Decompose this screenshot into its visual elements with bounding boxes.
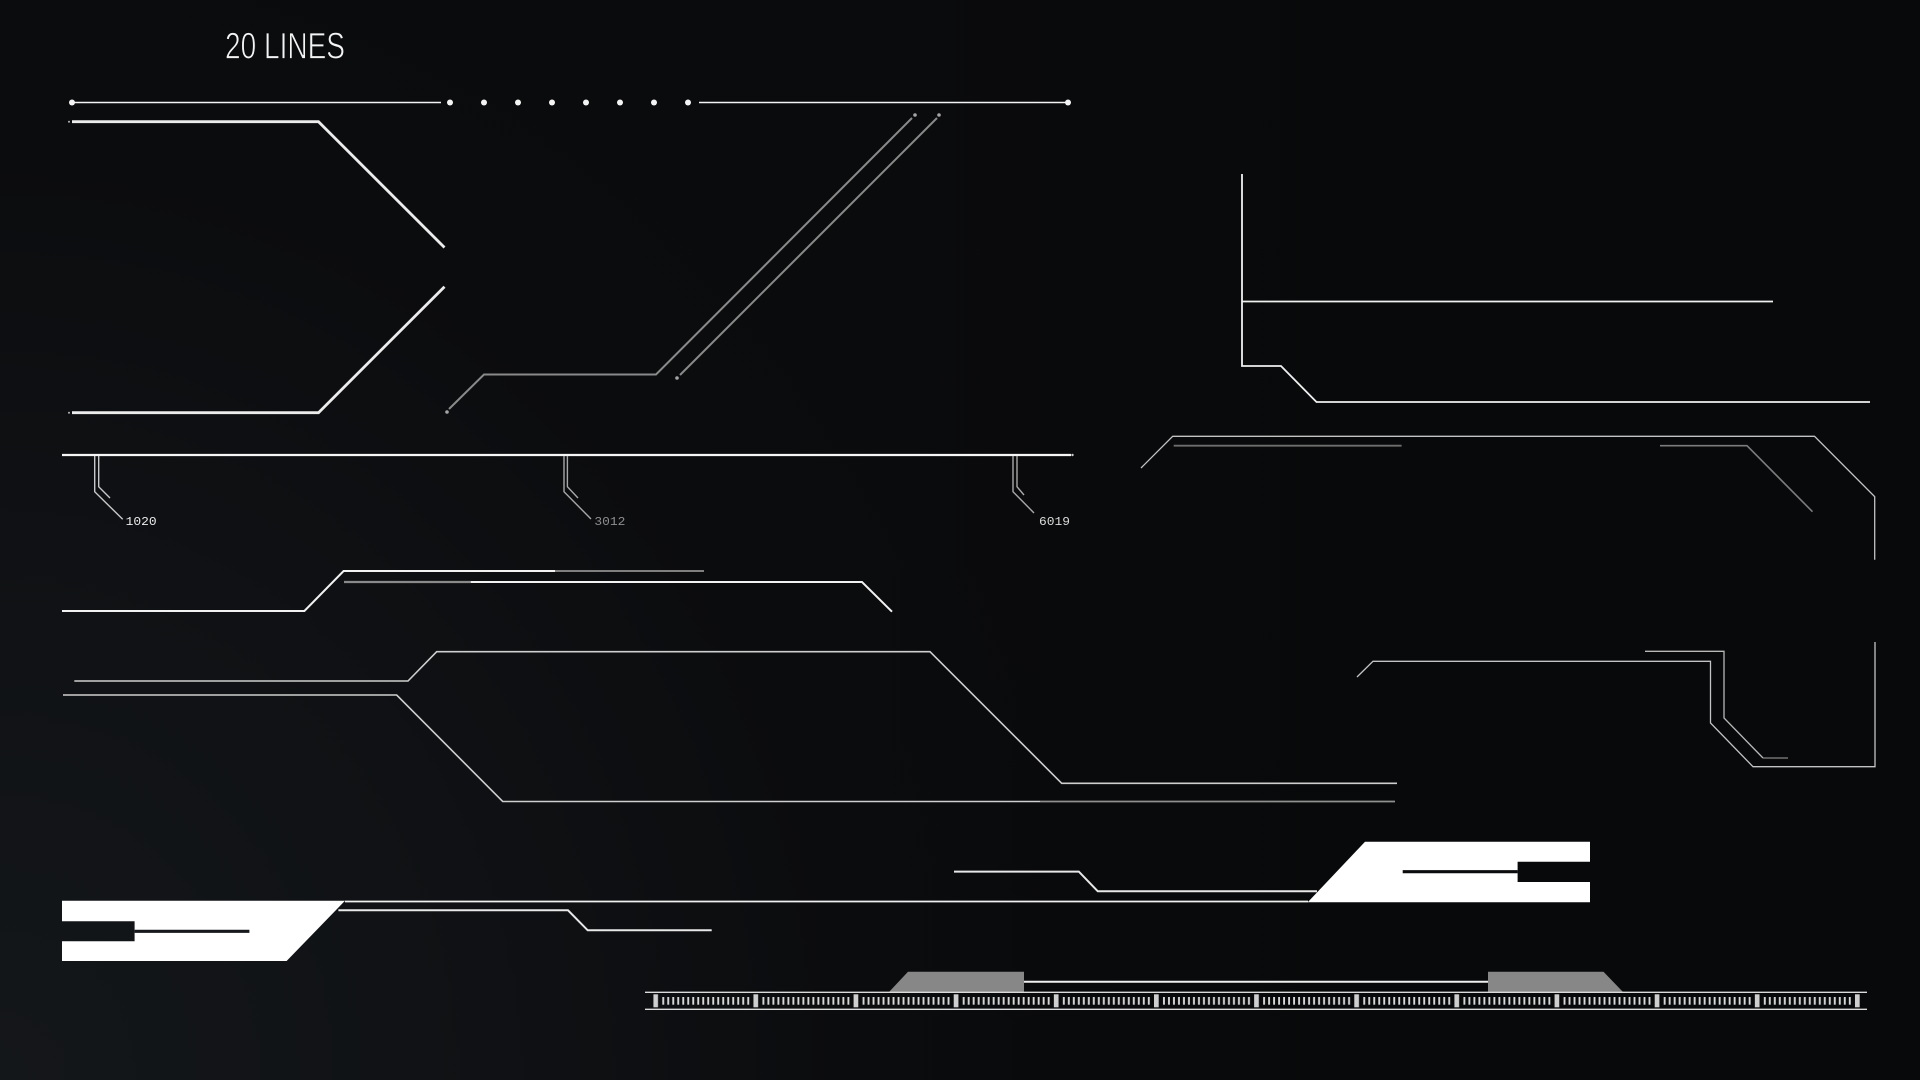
line 20: tick ruler [645, 992, 1867, 1009]
callout 3012 [564, 456, 625, 529]
line 15: right bottom frame [1357, 642, 1875, 767]
line 2: upper chevron arm [68, 121, 444, 248]
callout 1020 [95, 456, 157, 529]
callout 3012: 3012 [594, 515, 625, 529]
line 10: long upper stepped trace [74, 652, 1397, 783]
line 1: dotted rule [69, 100, 1071, 106]
line 5: grey diagonal trace parallel [675, 113, 941, 380]
line 8: stepped rule with grey fade [62, 571, 704, 611]
callout 6019 [1013, 456, 1070, 529]
line 19: grey tabs and connector [889, 972, 1623, 992]
callout 1020: 1020 [126, 515, 157, 529]
line 9: stepped rule with grey start [344, 582, 892, 612]
title: 20 LINES [225, 26, 345, 66]
line 12: right top frame [1141, 436, 1875, 560]
line 11: long lower stepped trace [63, 695, 1395, 802]
callout 6019: 6019 [1039, 515, 1070, 529]
line 7: labelled rule [62, 454, 1074, 529]
line 4: grey diagonal trace [445, 113, 917, 414]
line 18: right solid connector block [954, 842, 1590, 902]
line 6: right L-shaped bracket [1242, 174, 1870, 402]
line 3: lower chevron arm [68, 287, 444, 414]
line 13: grey short rule [1174, 445, 1402, 447]
line 14: grey angled rule [1660, 446, 1812, 512]
line 17: left solid connector block [62, 901, 1308, 961]
line 16: inner bracket [1645, 651, 1788, 758]
